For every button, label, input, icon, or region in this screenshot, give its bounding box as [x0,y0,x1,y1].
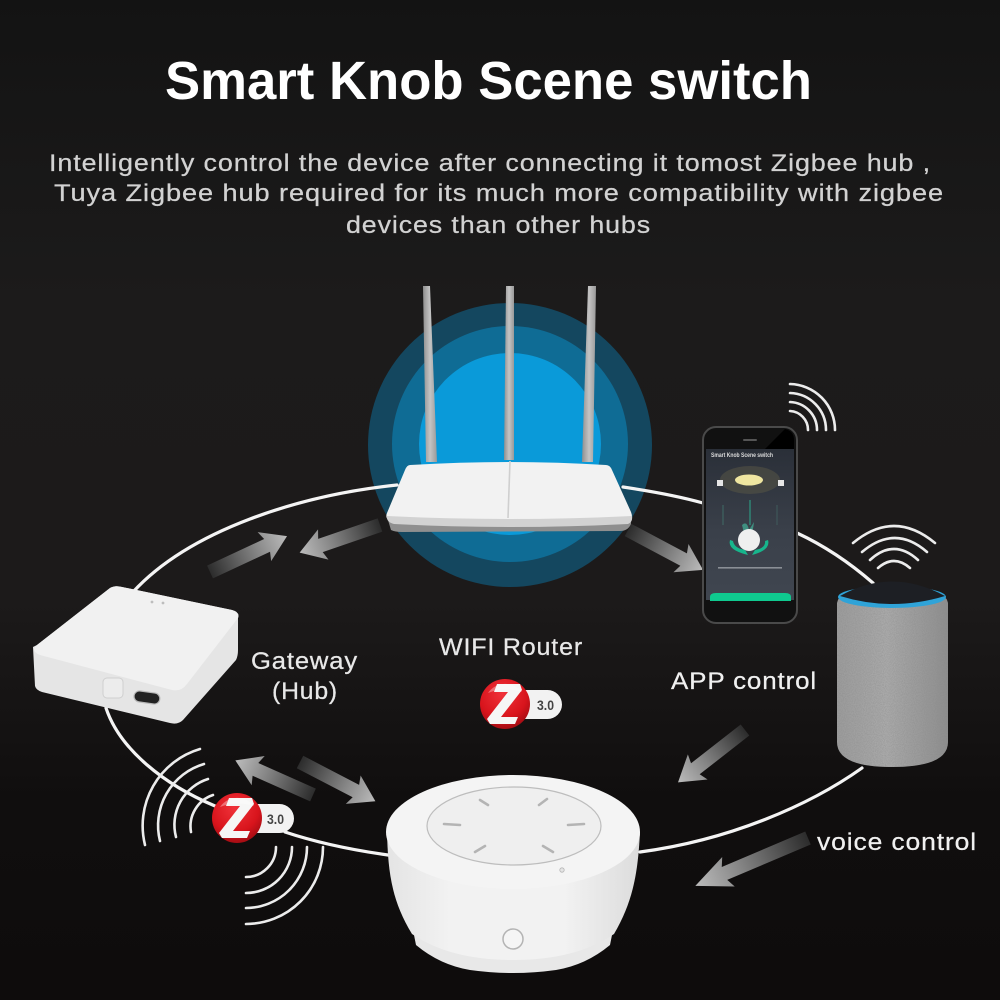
zigbee 3.0 badge: hub link [212,793,294,843]
connection ring [106,485,873,855]
zigbee 3.0 badge: hub link: 3.0 [267,811,284,827]
icon: gateway hub [33,586,238,724]
arrow: voice control to knob [689,823,814,901]
arrow: router to phone [620,516,711,584]
knob led [560,868,564,872]
zigbee 3.0 badge: router [480,679,562,729]
knob tick marks [444,799,584,852]
icon: wifi router [386,286,632,532]
router signal circles [368,303,652,587]
gateway label: (Hub) [272,678,338,705]
arrow: knob to hub [229,746,320,810]
description text: devices than other hubs [346,212,651,239]
knob button [503,929,523,949]
hub button [103,678,123,698]
arrow: router to hub [294,510,385,568]
knob top [386,775,640,889]
gateway label: Gateway [251,648,358,675]
phone knob graphic [718,522,782,569]
title: Smart Knob Scene switch [165,51,812,111]
knob dial [427,787,601,865]
icon: speaker signal waves [853,526,935,568]
icon: smart speaker [837,582,948,767]
app control label: APP control [671,668,817,695]
phone screen title: Smart Knob Scene switch [711,453,773,459]
phone lamp graphic [717,466,784,525]
icon: phone signal waves [790,384,835,430]
arrow: app control to knob [668,717,755,795]
wifi router label: WIFI Router [439,634,583,661]
icon: smartphone [703,427,797,623]
voice control label: voice control [817,829,977,856]
hub to knob signal waves: right [246,847,323,924]
arrow: hub to knob [293,748,383,815]
router antennas [423,286,596,462]
description text: Tuya Zigbee hub required for its much more compatibility with zigbee [54,180,944,207]
zigbee 3.0 badge: router: 3.0 [537,697,554,713]
description text: Intelligently control the device after connecting it tomost Zigbee hub , [49,150,931,177]
gateway label [251,648,358,705]
hub to knob signal waves: left [143,749,213,845]
icon: smart knob [386,775,640,973]
knob body [387,832,640,960]
knob base [412,925,614,973]
phone green button [710,593,791,601]
arrow: hub to router [203,522,294,587]
hub status dots [151,601,164,604]
hub usb port [133,690,161,705]
description text [49,150,944,239]
router body [386,461,632,532]
